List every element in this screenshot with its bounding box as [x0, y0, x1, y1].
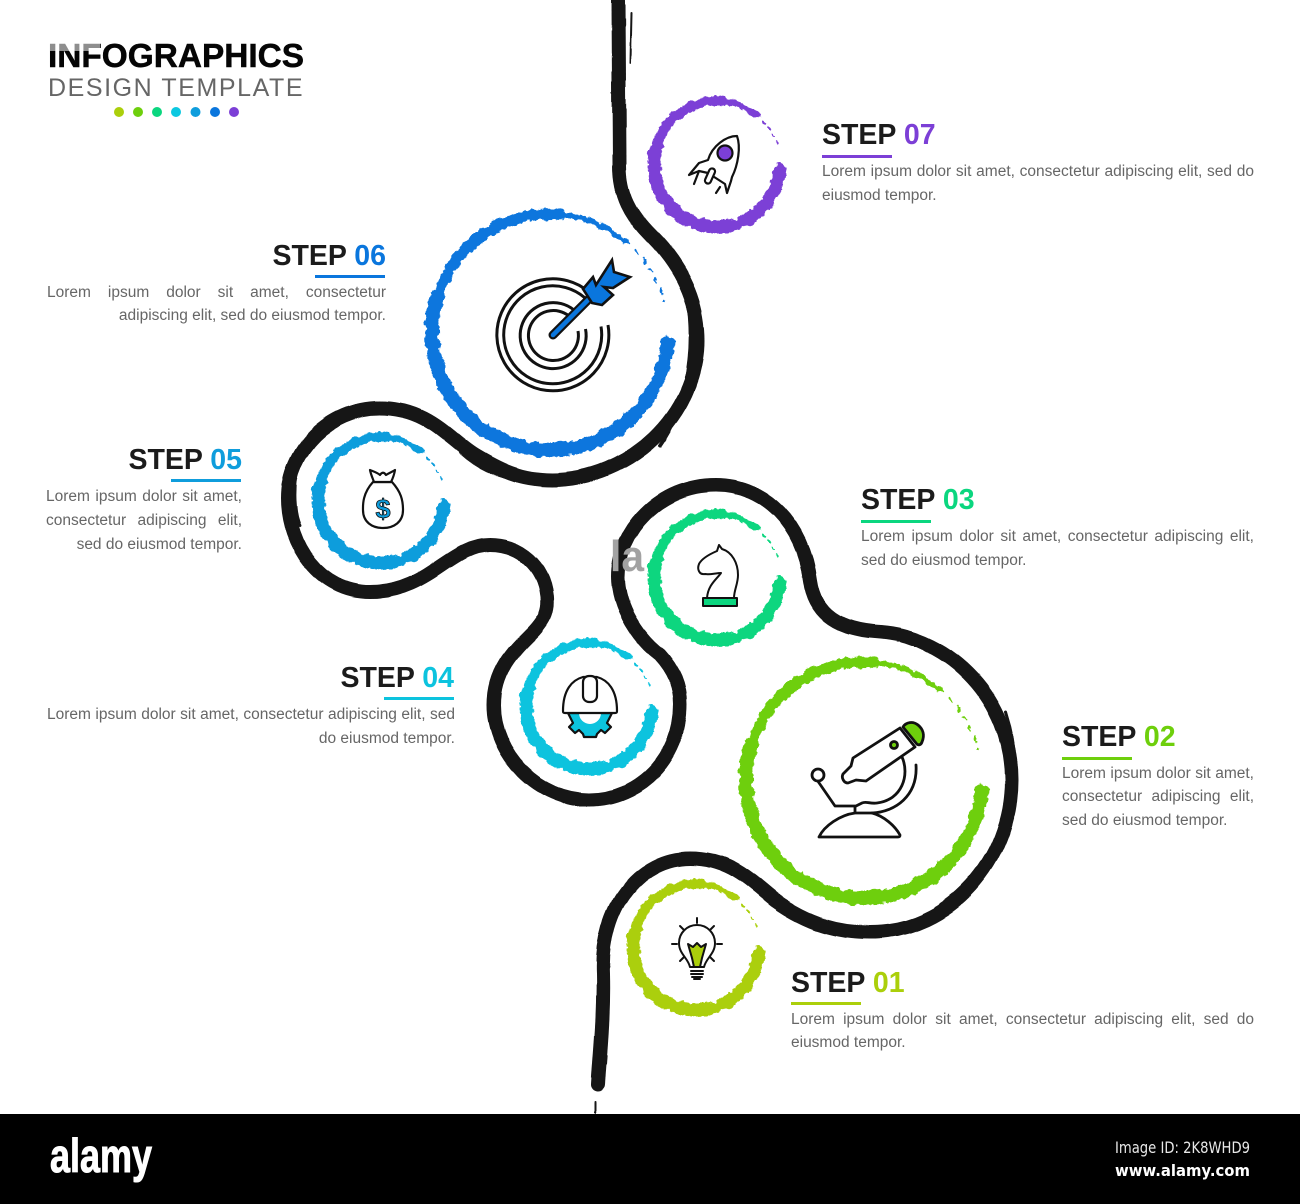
step 01 ring	[633, 884, 759, 1010]
step 02 description: consectetur adipiscing elit,	[1062, 788, 1254, 805]
step 07 text	[822, 119, 1254, 204]
step 05 description: consectetur adipiscing elit,	[46, 512, 242, 529]
step 06 description: Lorem ipsum dolor sit amet, consectetur	[47, 284, 386, 301]
step 05 description: Lorem ipsum dolor sit amet,	[46, 488, 242, 505]
step 03 description	[861, 528, 1254, 569]
title: DESIGN TEMPLATE	[48, 74, 304, 102]
step 03 text	[861, 484, 1254, 569]
step 01 text	[791, 967, 1254, 1051]
image id: Image ID: 2K8WHD9	[1115, 1138, 1250, 1157]
icon: light bulb	[672, 918, 722, 979]
step 03 description: Lorem ipsum dolor sit amet, consectetur adipiscing elit,	[861, 528, 1254, 545]
icon: helmet and gear	[563, 676, 617, 737]
step 06 text	[47, 240, 386, 324]
icon: target with arrow	[497, 260, 630, 391]
step 05 description	[46, 488, 242, 553]
step 07 description	[822, 163, 1254, 204]
road: black brush path	[288, 0, 1016, 1112]
step 04 ring	[526, 643, 652, 769]
step 01 underline	[791, 1002, 861, 1005]
colored dots	[114, 107, 239, 117]
website: www.alamy.com	[1115, 1161, 1250, 1180]
title	[48, 37, 304, 102]
step 07 description: eiusmod tempor.	[822, 187, 937, 204]
footer bar	[0, 1114, 1300, 1204]
step 01 heading: STEP 01	[791, 967, 905, 999]
step 02 description: sed do eiusmod tempor.	[1062, 812, 1227, 829]
step 04 text	[47, 662, 455, 747]
step 01 description: eiusmod tempor.	[791, 1034, 906, 1051]
icon: rocket	[689, 136, 739, 193]
step 06 description: adipiscing elit, sed do eiusmod tempor.	[119, 307, 386, 324]
step 02 description: Lorem ipsum dolor sit amet,	[1062, 765, 1254, 782]
icon: money bag: $	[375, 494, 391, 524]
step 02 description	[1062, 765, 1254, 829]
step 04 description: do eiusmod tempor.	[319, 730, 455, 747]
step 04 heading: STEP 04	[340, 662, 454, 694]
step 04 description: Lorem ipsum dolor sit amet, consectetur adipiscing elit, sed	[47, 706, 455, 723]
step 07 ring	[654, 101, 780, 227]
step 04 description	[47, 706, 455, 747]
step 02 heading: STEP 02	[1062, 721, 1176, 753]
step 05 ring	[318, 437, 444, 563]
step 05 heading: STEP 05	[128, 444, 242, 476]
step 05 description: sed do eiusmod tempor.	[77, 536, 242, 553]
title: INFOGRAPHICS	[48, 37, 304, 74]
step 03 underline	[861, 520, 931, 523]
step 03 ring	[654, 514, 780, 640]
watermark fragment: la	[610, 532, 644, 581]
step 06 ring	[432, 214, 668, 450]
icon: money bag	[363, 470, 403, 528]
step 01 description	[791, 1011, 1254, 1051]
step 02 ring	[746, 662, 982, 898]
step 07 heading: STEP 07	[822, 119, 936, 151]
step 07 description: Lorem ipsum dolor sit amet, consectetur adipiscing elit, sed do	[822, 163, 1254, 180]
step 06 description	[47, 284, 386, 324]
step 06 heading: STEP 06	[272, 240, 386, 272]
step 07 underline	[822, 155, 892, 158]
step 03 heading: STEP 03	[861, 484, 975, 516]
step 06 underline	[315, 275, 385, 278]
step 02 text	[1062, 721, 1254, 829]
step 04 underline	[384, 697, 454, 700]
icon: microscope	[812, 723, 923, 837]
step 03 description: sed do eiusmod tempor.	[861, 552, 1026, 569]
step 01 description: Lorem ipsum dolor sit amet, consectetur adipiscing elit, sed do	[791, 1011, 1254, 1028]
alamy logo: alamy	[50, 1129, 152, 1182]
step 05 underline	[171, 479, 241, 482]
icon: chess knight	[698, 545, 738, 606]
step 05 text	[46, 444, 242, 553]
step 02 underline	[1062, 757, 1132, 760]
